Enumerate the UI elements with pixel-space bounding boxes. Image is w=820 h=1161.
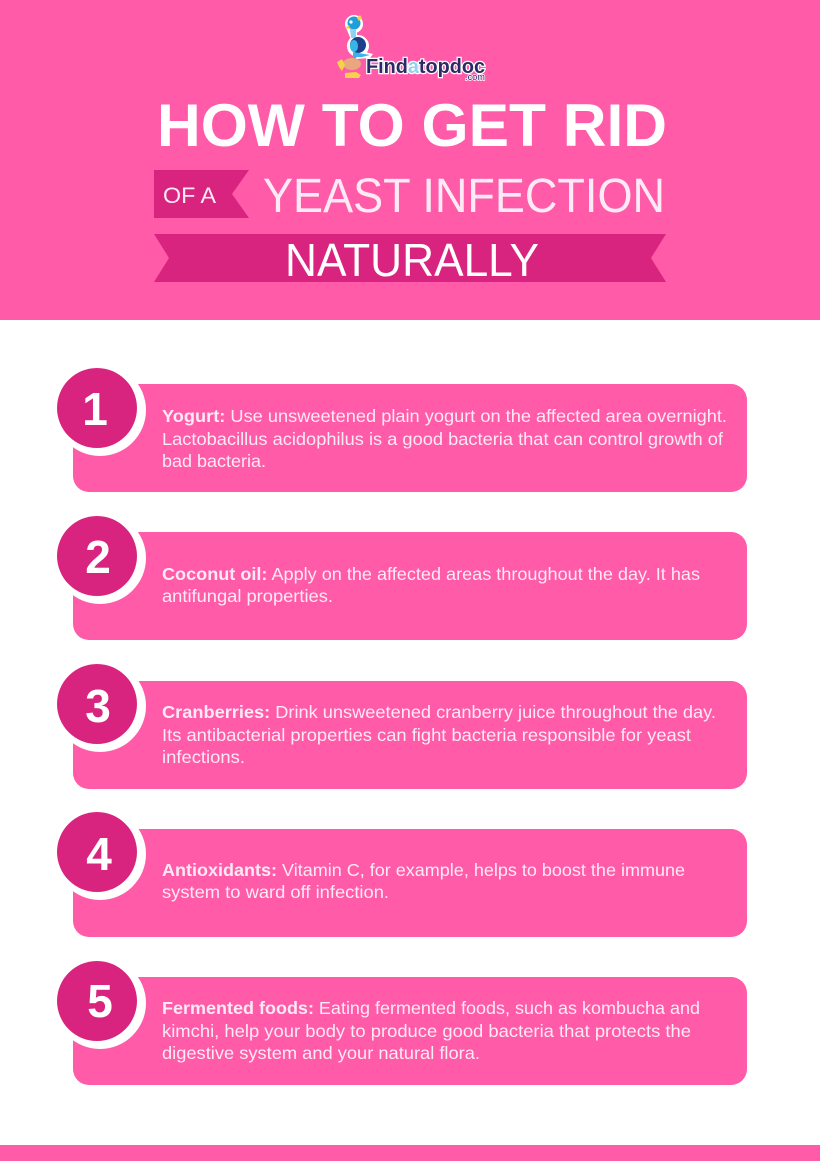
text: antioxidants description — [162, 860, 685, 902]
text: cranberries description: Cranberries: Drink unsweetened cranberry juice throughout the day. — [162, 702, 716, 722]
panel: step 4 antioxidants — [54, 808, 747, 937]
text: yogurt description — [162, 406, 727, 471]
panel: step 2 coconut oil — [54, 512, 747, 640]
text: coconut oil description — [162, 564, 700, 606]
text: fermented foods description: digestive system and your natural flora. — [162, 1043, 480, 1063]
icon: duck mascot — [337, 15, 373, 78]
title line: HOW TO GET RID: HOW TO GET RID — [157, 92, 667, 159]
icon: number 5 badge — [57, 961, 137, 1041]
footer band — [0, 1145, 820, 1161]
panel: step 1 yogurt — [54, 364, 747, 492]
text: cranberries description — [162, 702, 716, 767]
text: fermented foods description: kimchi, help your body to produce good bacteria that protects the — [162, 1021, 691, 1041]
icon: number 3 badge: 3 — [85, 680, 111, 732]
text: fermented foods description — [162, 998, 700, 1063]
ribbon: NATURALLY — [154, 234, 666, 286]
icon: number 1 badge: 1 — [82, 383, 108, 435]
text: cranberries description: Its antibacterial properties can fight bacteria responsible for yeast — [162, 725, 691, 745]
text: coconut oil description: antifungal properties. — [162, 586, 333, 606]
logo: Findatopdoc — [337, 15, 485, 82]
icon: number 1 badge — [57, 368, 137, 448]
icon: number 2 badge: 2 — [85, 531, 111, 583]
icon: number 3 badge — [57, 664, 137, 744]
logo .com: .com — [465, 72, 485, 82]
panel: step 3 cranberries — [54, 660, 747, 789]
text: antioxidants description: Antioxidants: Vitamin C, for example, helps to boost the immune — [162, 860, 685, 880]
text: coconut oil description: Coconut oil: Apply on the affected areas throughout the day. It has — [162, 564, 700, 584]
icon: number 4 badge: 4 — [86, 828, 112, 880]
header band — [0, 0, 820, 320]
logo wordmark: Findatopdoc — [366, 56, 485, 78]
icon: number 5 badge: 5 — [87, 975, 113, 1027]
ribbon: OF A: OF A — [163, 183, 216, 208]
ribbon: NATURALLY: NATURALLY — [285, 234, 539, 286]
panel: step 5 fermented foods — [54, 957, 747, 1085]
text: cranberries description: infections. — [162, 747, 245, 767]
text: yogurt description: Yogurt: Use unsweetened plain yogurt on the affected area overnight. — [162, 406, 727, 426]
icon: number 2 badge — [57, 516, 137, 596]
title line: YEAST INFECTION: YEAST INFECTION — [263, 170, 665, 223]
text: antioxidants description: system to ward off infection. — [162, 882, 389, 902]
text: fermented foods description: Fermented foods: Eating fermented foods, such as kombucha and — [162, 998, 700, 1018]
text: yogurt description: Lactobacillus acidophilus is a good bacteria that can control growth of — [162, 429, 723, 449]
ribbon: OF A — [154, 170, 249, 218]
icon: number 4 badge — [57, 812, 137, 892]
text: yogurt description: bad bacteria. — [162, 451, 266, 471]
